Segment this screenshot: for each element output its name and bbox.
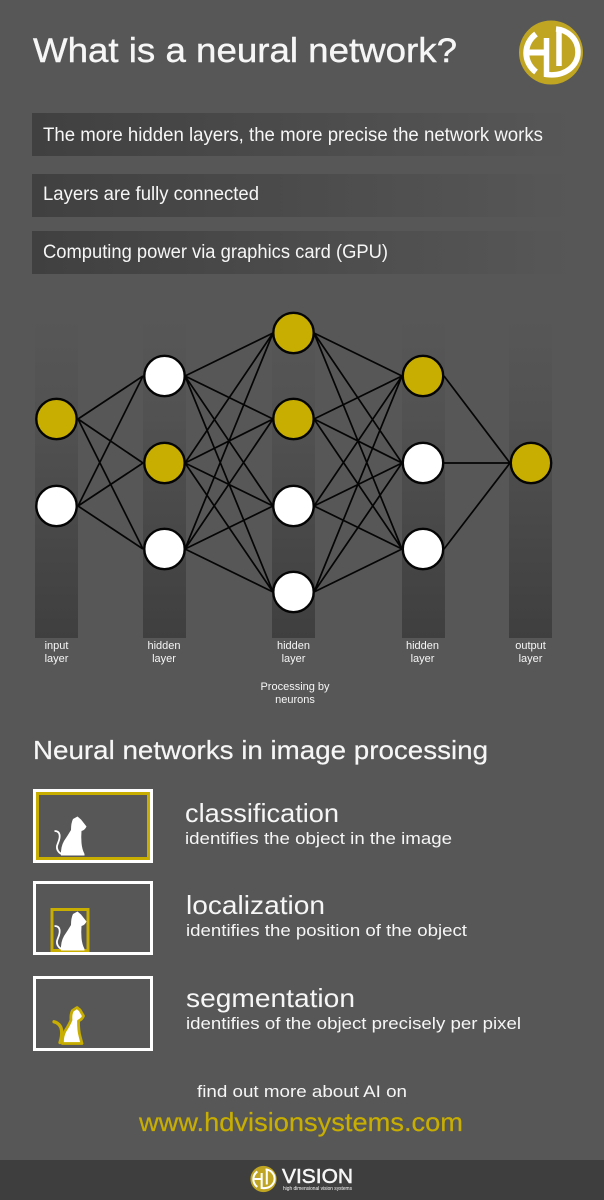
title: What is a neural network? xyxy=(33,32,457,70)
icon: localization frame with cat xyxy=(34,882,152,954)
caption: processing by neurons: Processing by xyxy=(260,681,330,693)
footer bar xyxy=(0,1160,604,1200)
layer labels: output xyxy=(515,640,546,652)
chart: neural network diagram xyxy=(35,313,552,706)
caption: processing by neurons xyxy=(260,681,330,706)
text: localization xyxy=(186,890,467,940)
heading: image processing: Neural networks in image processing xyxy=(33,735,488,765)
layer labels: input xyxy=(45,640,68,652)
icon: segmentation frame with outlined cat xyxy=(34,978,152,1050)
panel: key fact 2: Layers are fully connected xyxy=(43,184,259,205)
footer logo xyxy=(250,1166,353,1192)
website link: www.hdvisionsystems.com xyxy=(138,1107,463,1137)
panel: key fact 3: Computing power via graphics card (GPU) xyxy=(43,242,388,263)
layer labels: hidden xyxy=(147,640,181,652)
text: localization: identifies the position of the object xyxy=(186,921,467,940)
panel: key fact 1 xyxy=(32,113,572,156)
panel: key fact 1: The more hidden layers, the more precise the network works xyxy=(43,125,543,146)
text: classification xyxy=(185,798,452,848)
layer labels: layer xyxy=(45,653,69,665)
panel: key fact 2 xyxy=(32,174,572,217)
layer labels xyxy=(45,640,546,665)
layer labels: hidden xyxy=(277,640,310,652)
layer labels: layer xyxy=(519,653,543,665)
text: segmentation xyxy=(186,983,521,1033)
neurons xyxy=(36,313,551,612)
connections between neurons xyxy=(78,333,510,592)
logo: HD badge xyxy=(519,20,583,84)
icon: classification frame with cat xyxy=(34,790,152,862)
layer labels: layer xyxy=(411,653,435,665)
layer labels: hidden xyxy=(406,640,439,652)
panel: key fact 3 xyxy=(32,231,572,274)
text: localization: localization xyxy=(186,890,325,920)
call to action: find out more about AI on xyxy=(197,1082,407,1101)
caption: processing by neurons: neurons xyxy=(275,694,315,706)
layer labels: layer xyxy=(282,653,306,665)
layer labels: layer xyxy=(152,653,176,665)
footer logo: high dimensional vision systems xyxy=(283,1186,352,1192)
text: classification: identifies the object in the image xyxy=(185,829,452,848)
footer logo: VISION xyxy=(282,1166,353,1188)
text: classification: classification xyxy=(185,798,339,828)
text: segmentation: identifies of the object precisely per pixel xyxy=(186,1014,521,1033)
layer columns xyxy=(35,318,552,638)
text: segmentation: segmentation xyxy=(186,983,355,1013)
